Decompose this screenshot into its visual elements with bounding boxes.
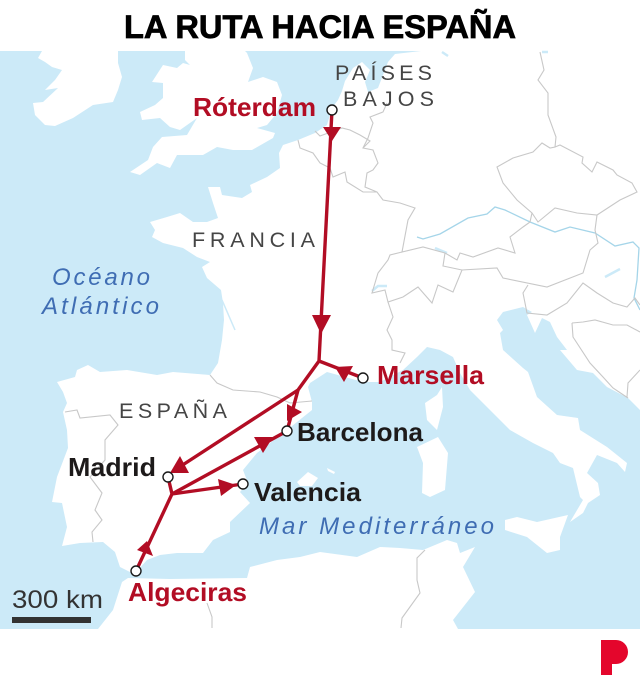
- label: Róterdam: Róterdam: [193, 92, 316, 122]
- land: Balearic Islands: [297, 468, 335, 486]
- Danube river: [417, 207, 640, 310]
- scale bar: 300 km: [12, 586, 103, 614]
- label: Madrid: Madrid: [68, 452, 156, 482]
- land: Ireland: [33, 51, 122, 126]
- land: North Africa: [98, 540, 475, 629]
- label: Algeciras: Algeciras: [128, 577, 247, 607]
- city markers: [131, 105, 368, 576]
- land: Sicily: [505, 515, 568, 553]
- label: Marsella: Marsella: [377, 360, 485, 390]
- label: Países Bajos: [335, 60, 434, 111]
- inland water: [222, 52, 620, 330]
- land: Sardinia: [417, 437, 448, 497]
- label: Mar Mediterráneo: Mar Mediterráneo: [259, 513, 494, 540]
- label: Francia: FRANCIA: [192, 228, 316, 252]
- label: Océano Atlántico: Océano: [52, 264, 150, 291]
- country borders: [65, 52, 640, 628]
- logo: [601, 640, 628, 675]
- label: Océano Atlántico: Atlántico: [40, 293, 159, 320]
- label: Océano Atlántico: [40, 264, 159, 320]
- label: España: ESPAÑA: [119, 398, 228, 423]
- route lines: [136, 110, 363, 571]
- label: Países Bajos: PAÍSES: [335, 60, 432, 85]
- title: LA RUTA HACIA ESPAÑA: [124, 9, 516, 45]
- land: Corsica: [425, 387, 443, 430]
- label: Valencia: Valencia: [254, 477, 362, 507]
- scale bar: [12, 586, 103, 623]
- label: Barcelona: Barcelona: [297, 417, 424, 447]
- label: Países Bajos: BAJOS: [343, 87, 434, 111]
- land: mainland Europe: [52, 51, 640, 573]
- land: Great Britain: [130, 51, 282, 175]
- route arrowheads: [137, 127, 353, 556]
